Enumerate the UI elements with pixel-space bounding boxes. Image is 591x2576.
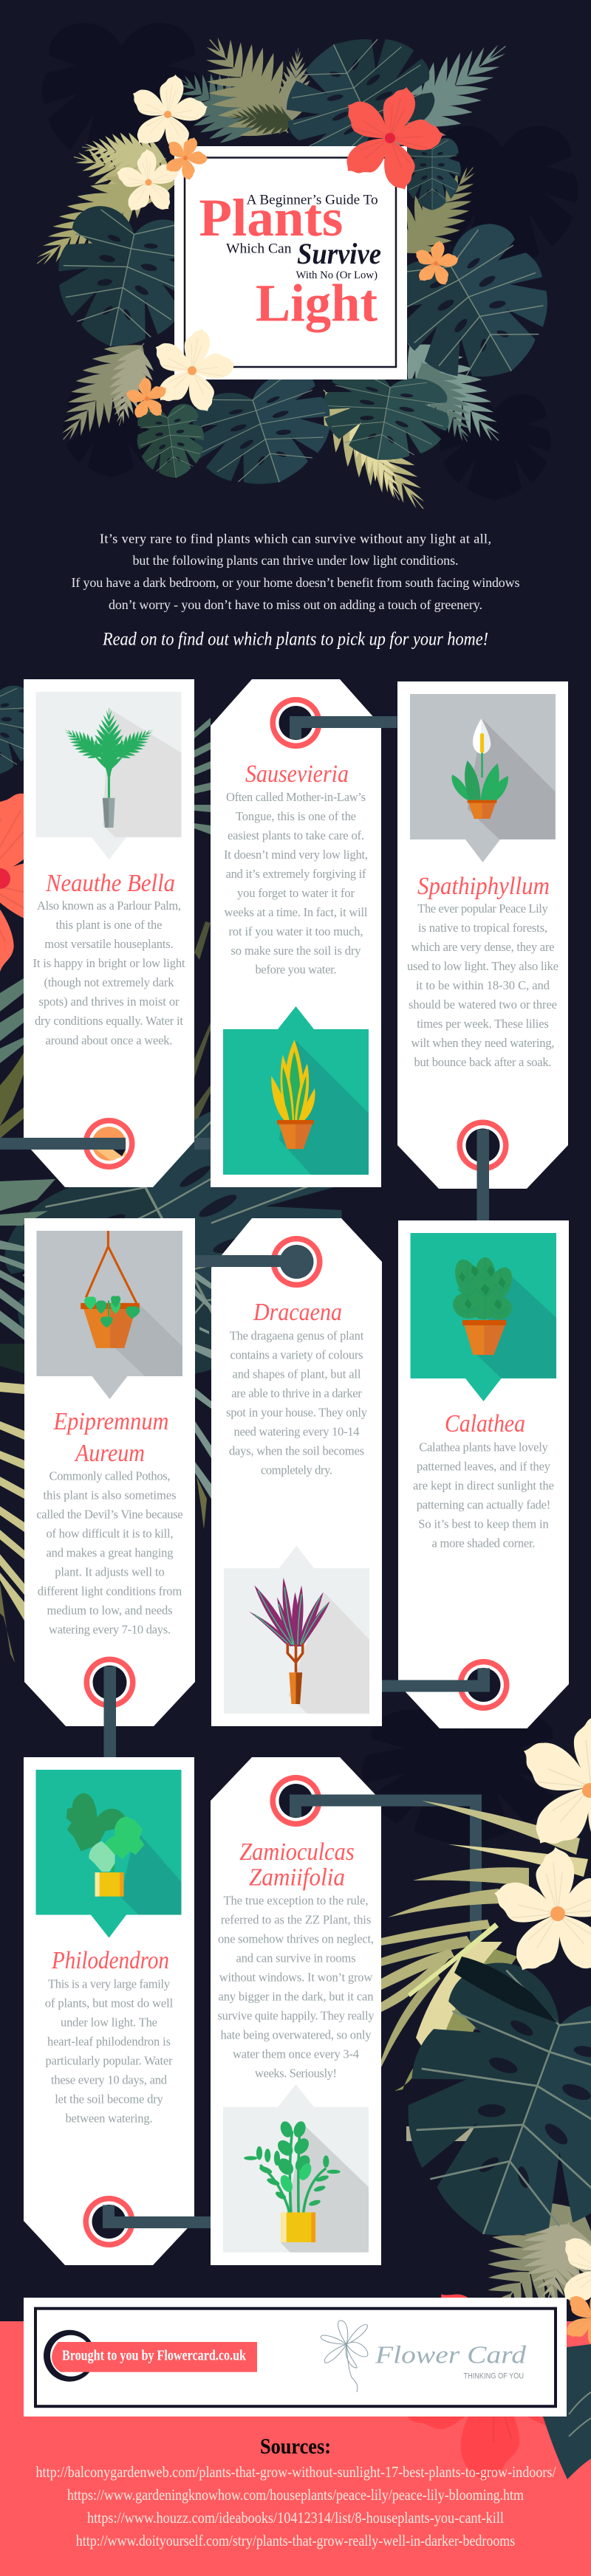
intro text: It’s very rare to find plants which can survive without any light at all, — [100, 531, 491, 546]
tag hole — [84, 1657, 136, 1708]
intro text — [71, 531, 520, 612]
image panel — [35, 1770, 182, 1938]
string segment between cards — [194, 1138, 211, 1150]
description: is native to tropical forests, — [418, 921, 547, 935]
description: this plant is also sometimes — [43, 1488, 176, 1502]
coral hibiscus — [0, 732, 131, 1032]
title card frame — [174, 146, 407, 379]
logo: Flower Card — [321, 2321, 527, 2392]
description: and it’s extremely forgiving if — [226, 867, 366, 881]
right big monstera — [367, 1944, 591, 2276]
image panel — [35, 692, 182, 859]
description: survive quite happily. They really — [217, 2009, 375, 2023]
heading: Philodendron — [51, 1947, 169, 1974]
description: different light conditions from — [38, 1584, 182, 1598]
hero flowers — [111, 69, 462, 424]
right cream flowers — [483, 1704, 591, 2328]
description: dry conditions equally. Water it — [35, 1014, 183, 1028]
description: It is happy in bright or low light — [33, 956, 185, 970]
description: of plants, but most do well — [45, 1996, 174, 2010]
description: referred to as the ZZ Plant, this — [221, 1913, 371, 1927]
description: particularly popular. Water — [46, 2054, 173, 2068]
tag hole — [457, 1119, 508, 1171]
description: called the Devil’s Vine because — [36, 1508, 183, 1521]
description: times per week. These lilies — [417, 1017, 549, 1031]
intro text: If you have a dark bedroom, or your home doesn’t benefit from south facing windows — [71, 575, 520, 590]
tag hole — [83, 1118, 134, 1169]
heading: Calathea — [445, 1410, 525, 1438]
tag hole — [270, 1236, 322, 1288]
title: Survive — [297, 237, 381, 270]
sources: https://www.gardeningknowhow.com/houseplants/peace-lily/peace-lily-blooming.htm — [67, 2486, 524, 2504]
tag hole — [458, 1659, 510, 1711]
icon: parlour palm — [58, 708, 181, 837]
description: plant. It adjusts well to — [55, 1565, 165, 1579]
tag string — [477, 1130, 489, 1221]
description: a more shaded corner. — [431, 1536, 535, 1550]
description: around about once a week. — [46, 1034, 173, 1047]
image panel — [224, 1546, 369, 1714]
title: With No (Or Low) — [296, 269, 378, 281]
description: Also known as a Parlour Palm, — [37, 899, 181, 913]
tag string — [103, 1666, 116, 1757]
lower palm fronds — [300, 370, 447, 529]
description: most versatile houseplants. — [44, 937, 174, 951]
description: are able to thrive in a darker — [231, 1387, 362, 1400]
card: Epipremnum Aureum — [24, 1218, 195, 1757]
card: Dracaena — [195, 1218, 382, 1726]
description: let the soil become dry — [55, 2092, 164, 2106]
description: before you water. — [256, 963, 337, 976]
lower right palm — [452, 2173, 591, 2350]
description: patterning can actually fade! — [417, 1497, 550, 1512]
icon: snake plant — [271, 1040, 369, 1175]
tag string — [290, 1794, 381, 1817]
title — [199, 188, 381, 333]
top palm fronds — [161, 12, 526, 171]
description: watering every 7-10 days. — [49, 1623, 171, 1636]
description: you forget to water it for — [237, 886, 355, 900]
description: easiest plants to take care of. — [228, 828, 364, 842]
description: hate being overwatered, so only — [220, 2028, 372, 2042]
description: spots) and thrives in moist or — [38, 995, 180, 1009]
right palm fronds — [383, 150, 521, 461]
description: are kept in direct sunlight the — [413, 1478, 554, 1493]
description: Calathea plants have lovely — [419, 1440, 548, 1454]
icon: zz plant — [244, 2120, 369, 2253]
heading: Sausevieria — [245, 760, 349, 788]
description: This is a very large family — [48, 1977, 171, 1991]
description: The ever popular Peace Lily — [417, 901, 548, 916]
description — [226, 1329, 368, 1477]
heading: Neauthe Bella — [45, 870, 175, 897]
card: Spathiphyllum — [397, 681, 568, 1221]
description: between watering. — [65, 2112, 152, 2126]
card: Calathea — [382, 1220, 569, 1728]
description: completely dry. — [261, 1463, 332, 1477]
description: any bigger in the dark, but it can — [219, 1990, 374, 2004]
palm fronds behind cards — [0, 1179, 211, 1663]
description: should be watered two or three — [409, 997, 557, 1011]
heading: Zamioculcas — [239, 1838, 355, 1866]
dark background leaves — [42, 23, 578, 500]
heading: Epipremnum — [53, 1408, 168, 1435]
credit ring — [44, 2330, 95, 2382]
description: under low light. The — [61, 2016, 157, 2030]
left palm fronds — [20, 126, 185, 458]
coral footer band — [0, 2321, 591, 2576]
description: so make sure the soil is dry — [230, 944, 361, 958]
card: Zamioculcas Zamiifolia — [211, 1757, 381, 2265]
icon: philodendron — [66, 1793, 181, 1914]
image panel — [37, 1231, 182, 1399]
description: The true exception to the rule, — [223, 1894, 368, 1908]
image panel — [410, 694, 556, 862]
card: Neauthe Bella — [0, 679, 194, 1187]
description — [33, 899, 185, 1047]
sources: http://www.doityourself.com/stry/plants-that-grow-really-well-in-darker-bedrooms — [76, 2532, 515, 2549]
sources — [35, 2434, 556, 2549]
tag string — [0, 1138, 126, 1150]
description: heart-leaf philodendron is — [47, 2035, 171, 2049]
description: So it’s best to keep them in — [418, 1517, 549, 1531]
right palm leaves — [381, 1801, 591, 2141]
image panel — [223, 2084, 369, 2253]
description: used to low light. They also like — [407, 959, 558, 973]
tag hole — [270, 1775, 322, 1827]
description: weeks at a time. In fact, it will — [225, 905, 368, 919]
description: these every 10 days, and — [51, 2073, 168, 2087]
description — [36, 1469, 183, 1636]
description: need watering every 10-14 — [233, 1425, 359, 1438]
tag string — [195, 1255, 296, 1267]
icon: hanging pot — [81, 1231, 182, 1376]
credit label — [52, 2342, 257, 2372]
heading: Dracaena — [253, 1299, 342, 1326]
description — [217, 1894, 375, 2081]
hero botanical wreath — [20, 12, 578, 529]
card: Philodendron — [24, 1757, 211, 2265]
connector from card 8 — [381, 1794, 482, 2030]
card: Epipremnum Aureum: Aureum — [74, 1440, 145, 1467]
tag hole — [83, 2196, 134, 2247]
description: but bounce back after a soak. — [414, 1055, 551, 1069]
tag string — [290, 716, 397, 739]
description: without windows. It won’t grow — [219, 1971, 372, 1985]
title: Light — [256, 274, 378, 333]
image panel — [223, 1006, 369, 1175]
central monstera behind cards — [0, 1073, 393, 1443]
monstera leaves — [44, 13, 577, 504]
description — [224, 790, 368, 976]
description: It doesn’t mind very low light, — [224, 848, 368, 862]
description: Tongue, this is one of the — [236, 809, 356, 823]
icon: calathea — [447, 1257, 556, 1378]
intro text: but the following plants can thrive under low light conditions. — [133, 553, 458, 568]
credit panel — [24, 2298, 567, 2417]
tag string — [382, 1668, 490, 1692]
left background foliage — [0, 686, 211, 1138]
card: Zamioculcas Zamiifolia: Zamiifolia — [249, 1864, 345, 1892]
icon: dracaena — [249, 1578, 369, 1714]
tag string — [103, 2205, 211, 2228]
description — [407, 901, 558, 1069]
right background dark monstera — [362, 1709, 561, 1845]
right footer foliage — [349, 2238, 591, 2525]
intro text: don’t worry - you don’t have to miss out on adding a touch of greenery. — [109, 597, 482, 612]
sources: Sources: — [260, 2434, 331, 2459]
description: Commonly called Pothos, — [49, 1469, 170, 1483]
description: one somehow thrives on neglect, — [218, 1932, 374, 1946]
title: Plants — [199, 188, 343, 247]
title: A Beginner’s Guide To — [247, 193, 378, 208]
description: contains a variety of colours — [230, 1348, 363, 1361]
description: and makes a great hanging — [46, 1546, 173, 1559]
description: which are very dense, they are — [411, 940, 554, 954]
description: it to be within 18-30 C, and — [416, 978, 550, 992]
description: spot in your house. They only — [226, 1406, 368, 1419]
description — [45, 1977, 174, 2126]
description: of how difficult it is to kill, — [46, 1527, 173, 1540]
image panel — [411, 1233, 556, 1401]
description: rot if you water it too much, — [229, 924, 363, 938]
card: Sausevieria — [211, 679, 397, 1187]
call to action: Read on to find out which plants to pick up for your home! — [102, 630, 488, 650]
credit label: Brought to you by Flowercard.co.uk — [62, 2348, 247, 2364]
sources: https://www.houzz.com/ideabooks/10412314/list/8-houseplants-you-cant-kill — [87, 2509, 504, 2527]
description: water them once every 3-4 — [233, 2047, 359, 2061]
description: The dragaena genus of plant — [230, 1329, 364, 1342]
description: and can survive in rooms — [236, 1951, 356, 1965]
icon: peace lily — [451, 718, 556, 839]
description: (though not extremely dark — [44, 975, 174, 989]
description: this plant is one of the — [56, 918, 163, 932]
title: Which Can — [226, 242, 291, 257]
logo: Flower Card: THINKING OF YOU — [464, 2372, 524, 2381]
description: weeks. Seriously! — [255, 2067, 337, 2081]
description: patterned leaves, and if they — [417, 1459, 551, 1474]
description: medium to low, and needs — [47, 1604, 173, 1617]
description: wilt when they need watering, — [411, 1036, 554, 1050]
logo: Flower Card: Flower Card — [375, 2342, 527, 2369]
heading: Spathiphyllum — [417, 873, 550, 900]
description: days, when the soil becomes — [229, 1444, 364, 1457]
description: Often called Mother-in-Law’s — [226, 790, 366, 804]
tag hole — [270, 697, 322, 749]
description — [413, 1440, 554, 1550]
description: and shapes of plant, but all — [232, 1367, 361, 1381]
